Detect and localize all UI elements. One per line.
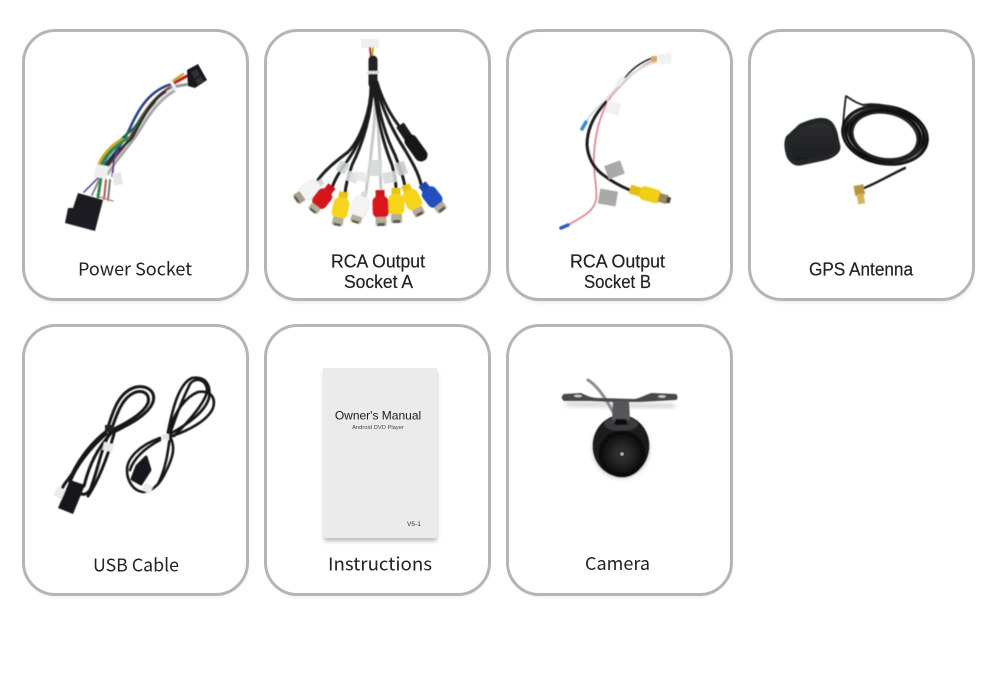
icon: owner's manual booklet [323, 368, 437, 541]
label: RCA output socket B: RCA Output [570, 252, 665, 272]
panel: RCA output socket A [266, 30, 490, 302]
label: RCA output socket A [331, 252, 425, 292]
icon: owner's manual booklet: Android DVD Player [352, 425, 404, 431]
panel: camera [508, 326, 732, 596]
label: camera: Camera [585, 550, 650, 576]
label: power socket: Power Socket [78, 256, 192, 282]
panel: USB cable [24, 326, 248, 596]
label: RCA output socket A: RCA Output [331, 252, 425, 272]
panel: power socket [24, 30, 248, 302]
icon: owner's manual booklet: V5-1 [407, 521, 421, 528]
label: RCA output socket B: Socket B [584, 272, 651, 292]
label: RCA output socket B [570, 252, 665, 292]
panel: instructions [266, 326, 490, 596]
panel: GPS antenna [750, 30, 974, 302]
label: USB cable: USB Cable [93, 552, 179, 578]
icon: RCA cable B [561, 53, 672, 228]
label: GPS antenna: GPS Antenna [809, 260, 914, 280]
label: RCA output socket A: Socket A [344, 272, 413, 292]
panel: RCA output socket B [508, 30, 732, 302]
icon: reversing camera [562, 380, 678, 479]
label: instructions: Instructions [328, 550, 432, 576]
icon: power socket harness [65, 64, 207, 231]
icon: RCA cable bundle [291, 39, 449, 227]
icon: owner's manual booklet: Owner's Manual [335, 408, 421, 422]
icon: GPS antenna [787, 96, 932, 205]
icon: USB cables [53, 378, 214, 514]
